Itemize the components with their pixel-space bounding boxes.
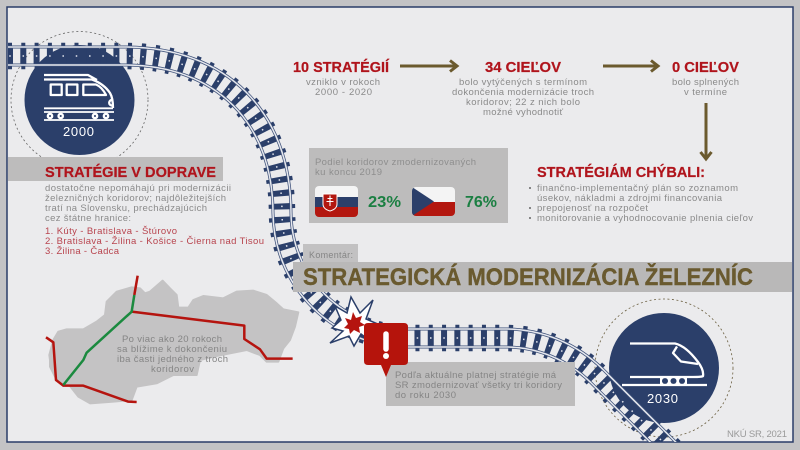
icon: Slovak flag xyxy=(315,186,358,217)
list of corridors: 1. Kúty - Bratislava - Štúrovo xyxy=(45,226,177,237)
bullet list xyxy=(529,183,753,224)
text: bolo splnených xyxy=(672,77,739,98)
bullet list: úsekov, nákladmi a zdrojmi financovania xyxy=(537,193,723,204)
arrow xyxy=(400,60,457,72)
circle: 2000 xyxy=(11,32,148,168)
text: bolo splnených: bolo splnených xyxy=(672,77,739,88)
map caption: iba časti jedného z troch xyxy=(117,354,228,365)
list of corridors xyxy=(45,226,264,257)
map caption xyxy=(117,334,228,375)
comment box: strategy 2030: SR zmodernizovať všetky tri koridory xyxy=(395,380,562,391)
text block: stratégie description: železničných koridorov; najdôležitejších xyxy=(45,193,226,204)
heading band: stratégie v doprave: STRATÉGIE V DOPRAVE xyxy=(45,164,216,181)
text: bolo vytýčených: možné vyhodnotiť xyxy=(483,107,563,118)
map caption: Po viac ako 20 rokoch xyxy=(122,334,222,345)
text: bolo vytýčených: bolo vytýčených s termínom xyxy=(459,77,587,88)
label: 2000: 2000 xyxy=(63,124,94,139)
arrow xyxy=(603,60,658,72)
icon: train 2030 xyxy=(622,344,707,385)
value: 23%: 23% xyxy=(368,194,401,211)
icon: alert xyxy=(364,323,408,377)
heading: stratégiám chýbali: STRATÉGIÁM CHÝBALI: xyxy=(537,163,705,181)
comment box: strategy 2030: do roku 2030 xyxy=(395,390,456,401)
icon: explosion xyxy=(330,297,380,346)
text block: stratégie description: tratí na Slovensku, prechádzajúcich xyxy=(45,203,207,214)
text: bolo vytýčených: dokončenia modernizácie troch xyxy=(452,87,594,98)
panel: corridor share xyxy=(309,148,508,223)
comment box: strategy 2030: Podľa aktuálne platnej stratégie má xyxy=(395,370,557,381)
railway track xyxy=(7,47,686,450)
label: komentár xyxy=(303,244,358,262)
corridor lines xyxy=(46,276,293,402)
bullet list: finančno-implementačný plán so zoznamom xyxy=(537,183,738,194)
panel: corridor share: ku koncu 2019 xyxy=(315,167,382,178)
text block: stratégie description: cez štátne hranice: xyxy=(45,213,131,224)
circle: 2030 xyxy=(595,299,733,437)
map caption: koridorov xyxy=(151,364,194,375)
value: 76%: 76% xyxy=(465,194,497,211)
text: vzniklo: 2000 - 2020 xyxy=(315,87,372,98)
icon: Czech flag xyxy=(412,187,455,216)
map of Slovakia xyxy=(46,276,298,403)
map caption: sa blížime k dokončeniu xyxy=(117,344,227,355)
text: bolo splnených: v termíne xyxy=(684,87,727,98)
comment box: strategy 2030 xyxy=(386,362,575,406)
label: komentár: Komentár: xyxy=(309,250,353,260)
text block: stratégie description xyxy=(45,183,231,224)
text: bolo vytýčených: koridorov; 22 z nich bolo xyxy=(466,97,580,108)
bullet list: monitorovanie a vyhodnocovanie plnenia cieľov xyxy=(537,213,753,224)
heading band: stratégie v doprave xyxy=(8,157,223,181)
bullet list: prepojenosť na rozpočet xyxy=(537,203,648,214)
title band: STRATEGICKÁ MODERNIZÁCIA ŽELEZNÍC xyxy=(303,263,753,291)
list of corridors: 2. Bratislava - Žilina - Košice - Čierna nad Tisou xyxy=(45,236,264,247)
headline: 10 stratégií: 10 STRATÉGIÍ xyxy=(293,59,390,76)
headline: 34 cieľov: 34 CIEĽOV xyxy=(485,60,561,76)
text: bolo vytýčených xyxy=(452,77,594,118)
credit: NKÚ SR, 2021 xyxy=(727,429,787,440)
label: 2030: 2030 xyxy=(647,391,678,406)
headline: 0 cieľov: 0 CIEĽOV xyxy=(672,60,739,76)
icon: train 2000 xyxy=(44,75,114,120)
arrow down xyxy=(700,103,712,159)
text: vzniklo: vzniklo v rokoch xyxy=(306,77,380,88)
text: vzniklo xyxy=(306,77,380,98)
text block: stratégie description: dostatočne nepomáhajú pri modernizácii xyxy=(45,183,231,194)
list of corridors: 3. Žilina - Čadca xyxy=(45,246,120,257)
panel: corridor share: Podiel koridorov zmodernizovaných xyxy=(315,157,476,168)
